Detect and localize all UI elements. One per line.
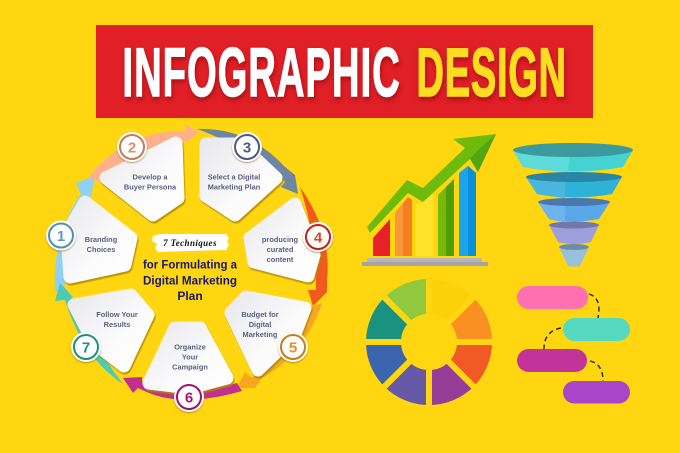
- donut segment blue: [363, 342, 411, 389]
- pill magenta: [517, 349, 587, 372]
- badge 2: 2: [128, 140, 136, 156]
- label 6: Organize: [174, 342, 206, 352]
- card 6: [149, 328, 227, 388]
- base: [362, 258, 488, 266]
- label 7: Follow Your: [96, 310, 138, 319]
- funnel layer 1: [513, 143, 633, 172]
- arrow 5: [237, 303, 322, 388]
- center title: for Formulating a: [143, 258, 237, 272]
- label 6: Campaign: [172, 362, 208, 372]
- connector 2: [544, 328, 561, 349]
- label 7: Results: [104, 320, 130, 329]
- badge 3: 3: [243, 140, 251, 156]
- funnel layer 2: [526, 172, 622, 198]
- donut chart: [363, 276, 495, 408]
- center heading: [143, 234, 237, 303]
- badge 3: [232, 132, 262, 162]
- label 3: Marketing Plan: [208, 182, 261, 192]
- badge 4: 4: [314, 230, 323, 246]
- badge 6: 6: [185, 390, 193, 406]
- badge 1: 1: [57, 228, 65, 245]
- label 4: content: [267, 255, 294, 264]
- label 4: curated: [267, 245, 294, 254]
- label 5: Digital: [249, 320, 271, 329]
- bar green: [438, 179, 454, 256]
- card 3: [206, 144, 276, 215]
- badge 5: [278, 332, 308, 362]
- badge 4: [303, 222, 333, 252]
- card 1: [67, 202, 131, 277]
- donut segment red-orange: [447, 342, 495, 389]
- label 3: Select a Digital: [208, 172, 260, 182]
- label 5: Marketing: [243, 330, 278, 339]
- arrow 1: [55, 175, 96, 292]
- connector 3: [590, 361, 603, 381]
- card 7: [74, 295, 148, 366]
- cycle diagram: 7 techniques: [46, 124, 333, 412]
- connected pills flow: [517, 286, 630, 404]
- center heading: Digital Marketing: [143, 274, 237, 288]
- green arrow: [367, 134, 496, 233]
- donut segment purple: [429, 360, 476, 408]
- bar red: [373, 219, 390, 256]
- badge 6: [174, 382, 204, 412]
- card 5: [231, 297, 305, 370]
- bar orange: [395, 197, 412, 256]
- donut segment green: [382, 276, 429, 324]
- donut segment yellow: [429, 276, 476, 324]
- badge 5: 5: [289, 340, 297, 356]
- label 1: Choices: [87, 245, 115, 254]
- card 4: [250, 204, 314, 276]
- label 6: Your: [182, 352, 198, 362]
- badge 1: [46, 220, 76, 250]
- bar chart with rising arrow: [362, 134, 496, 266]
- center heading: Plan: [177, 289, 203, 303]
- label 2: Buyer Persona: [124, 182, 177, 192]
- label 5: Budget for: [241, 310, 279, 319]
- donut segment orange: [447, 295, 495, 342]
- donut segment violet: [382, 360, 429, 408]
- title text: [122, 34, 566, 111]
- label 2: Develop a: [133, 172, 167, 182]
- funnel layer 4: [549, 222, 599, 244]
- bar blue: [459, 166, 476, 256]
- funnel layer 3: [538, 198, 610, 222]
- pill pink: [517, 286, 588, 309]
- donut segment teal: [363, 295, 411, 342]
- arrow 6: [123, 377, 242, 400]
- arrow 2: [88, 124, 199, 182]
- title text: INFOGRAPHIC: [122, 34, 400, 111]
- bar yellow: [416, 193, 433, 256]
- pill purple: [563, 381, 630, 404]
- pill teal: [563, 318, 630, 341]
- arrow 3: [197, 129, 298, 194]
- arrow 4: [300, 187, 328, 306]
- funnel layer 5: [559, 244, 589, 266]
- card 2: [106, 143, 178, 215]
- connector 1: [589, 294, 599, 318]
- label 4: producing: [262, 235, 298, 244]
- badge 7: 7: [82, 340, 90, 356]
- brush stroke label: 7 Techniques: [163, 238, 217, 248]
- title banner: [96, 25, 593, 118]
- badge 2: [117, 132, 147, 162]
- arrow 7: [55, 283, 123, 384]
- title text: DESIGN: [416, 34, 566, 111]
- badge 7: [71, 332, 101, 362]
- label 1: Branding: [85, 235, 117, 244]
- funnel: [513, 143, 633, 266]
